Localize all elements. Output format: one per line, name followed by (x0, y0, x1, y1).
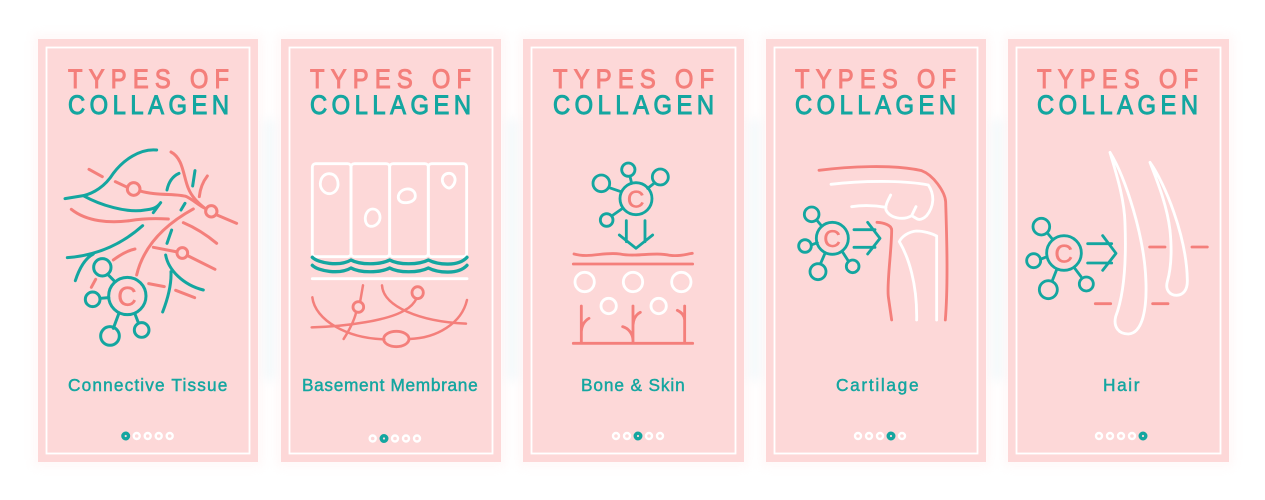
title: TYPES OF (1037, 65, 1198, 94)
title (310, 65, 471, 120)
panel: basement membrane (281, 39, 501, 462)
icon: molecule entering skin and bone: C (627, 186, 644, 213)
pagination dots (855, 433, 905, 439)
title: COLLAGEN (1037, 91, 1198, 120)
title (795, 65, 956, 120)
title (1037, 65, 1198, 120)
icon: molecule and knee joint: C (823, 226, 841, 253)
icon: cells, membrane and fibres (312, 164, 467, 347)
panel: connective tissue (38, 39, 258, 462)
icon: molecule entering skin and bone (573, 163, 693, 343)
title: TYPES OF (68, 65, 229, 94)
pagination dots (123, 433, 173, 439)
title: COLLAGEN (553, 91, 714, 120)
label: Connective Tissue (68, 375, 228, 395)
icon: molecule and hair strands (1027, 152, 1207, 334)
title: TYPES OF (795, 65, 956, 94)
icon: connective tissue fibres and collagen molecule: C (117, 282, 137, 312)
panel: cartilage (766, 39, 986, 462)
title: TYPES OF (553, 65, 714, 94)
title: COLLAGEN (795, 91, 956, 120)
title: TYPES OF (310, 65, 471, 94)
title: COLLAGEN (68, 91, 229, 120)
label: Bone & Skin (581, 375, 685, 395)
label: Basement Membrane (302, 375, 478, 395)
panel: hair (1008, 39, 1229, 462)
panel: bone and skin (523, 39, 744, 462)
icon: molecule and hair strands: C (1055, 240, 1073, 268)
icon: connective tissue fibres and collagen molecule (65, 150, 237, 345)
pagination dots (1096, 433, 1146, 439)
icon: molecule and knee joint (799, 167, 947, 320)
title (553, 65, 714, 120)
label: Hair (1103, 375, 1140, 395)
label: Cartilage (836, 375, 919, 395)
pagination dots (370, 436, 420, 442)
title (68, 65, 229, 120)
title: COLLAGEN (310, 91, 471, 120)
pagination dots (613, 433, 663, 439)
